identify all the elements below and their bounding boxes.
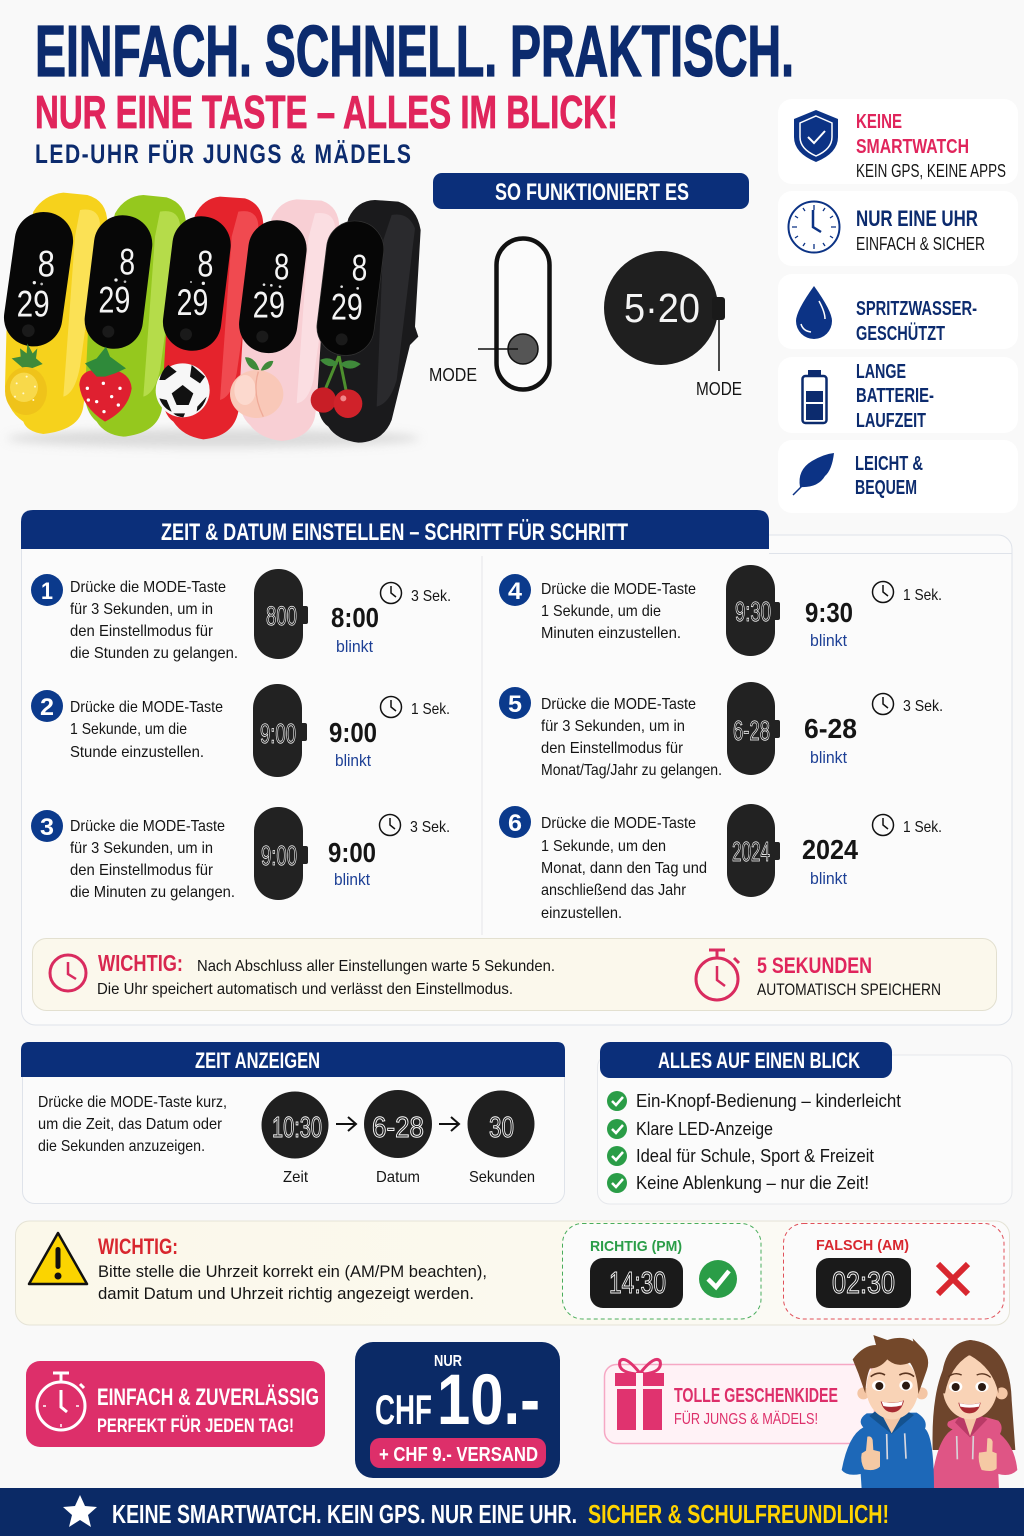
heading: schritt fuer schritt xyxy=(21,510,769,549)
icon: warning triangle xyxy=(29,1233,87,1284)
feature card: keine smartwatch: SMARTWATCH xyxy=(856,136,969,158)
callout: wichtig, automatisch speichern: WICHTIG: xyxy=(98,950,183,976)
watch: red football: 29 xyxy=(177,281,208,323)
panel: alles auf einen blick: ALLES AUF EINEN BLICK xyxy=(658,1048,860,1073)
richtig example: 14:30 xyxy=(609,1265,666,1300)
watch face: zeit: 10:30 xyxy=(272,1112,322,1144)
step 2: 9:00 xyxy=(260,718,296,749)
check item: Ein-Knopf-Bedienung – kinderleicht xyxy=(636,1091,901,1111)
panel: wichtig am pm: damit Datum und Uhrzeit richtig angezeigt werden. xyxy=(98,1284,474,1303)
step 2 xyxy=(31,684,450,777)
step 5: 5 xyxy=(508,691,522,718)
step 4 xyxy=(499,565,942,656)
footer banner: KEINE SMARTWATCH. KEIN GPS. NUR EINE UHR. xyxy=(112,1499,577,1529)
product line: LED-UHR FÜR JUNGS & MÄDELS xyxy=(35,140,411,170)
step 5: Monat/Tag/Jahr zu gelangen. xyxy=(541,762,722,779)
step 6: einzustellen. xyxy=(541,905,622,922)
step 6: 2024 xyxy=(732,836,770,867)
step 6 xyxy=(499,804,942,922)
panel: zeit und datum einstellen xyxy=(21,510,1012,1025)
feature card: spritzwassergeschuetzt: GESCHÜTZT xyxy=(856,322,945,345)
watch: pink peach: 29 xyxy=(253,283,285,325)
icon: feather xyxy=(793,453,834,495)
heading: so funktioniert es xyxy=(433,173,749,209)
subtitle: NUR EINE TASTE – ALLES IM BLICK! xyxy=(35,86,618,138)
step 3: 3 xyxy=(40,814,54,841)
step 3: blinkt xyxy=(334,870,370,889)
feature card: lange batterielaufzeit: LANGE xyxy=(856,361,906,383)
falsch example: 02:30 xyxy=(832,1265,895,1300)
step 1: 3 Sek. xyxy=(411,588,451,605)
richtig example: RICHTIG (PM) xyxy=(590,1238,682,1255)
step 1 xyxy=(31,569,451,662)
step 2: 9:00 xyxy=(329,717,377,748)
arrow xyxy=(439,1117,459,1131)
step 3: Drücke die MODE-Taste xyxy=(70,818,225,835)
illustration: boy xyxy=(842,1335,934,1489)
step 1: 800 xyxy=(266,601,297,631)
panel: alles auf einen blick xyxy=(598,1042,1012,1204)
gift callout: FÜR JUNGS & MÄDELS! xyxy=(674,1410,818,1428)
panel: wichtig am pm: Bitte stelle die Uhrzeit korrekt ein (AM/PM beachten), xyxy=(98,1262,487,1281)
watch face: datum: 6-28 xyxy=(372,1112,424,1144)
step 1: 1 xyxy=(41,578,53,605)
illustration: girl xyxy=(931,1340,1017,1489)
step 5: den Einstellmodus für xyxy=(541,740,684,757)
check item: Keine Ablenkung – nur die Zeit! xyxy=(636,1173,869,1193)
diagram: round watch face 5:20 xyxy=(604,251,742,399)
price box xyxy=(355,1342,560,1478)
step 6: Drücke die MODE-Taste xyxy=(541,815,696,832)
watch face: datum: Datum xyxy=(376,1169,420,1186)
step 2: 2 xyxy=(40,694,54,721)
gift callout xyxy=(604,1359,874,1444)
feature card: lange batterielaufzeit: BATTERIE- xyxy=(856,385,934,407)
panel: zeit anzeigen xyxy=(21,1042,565,1204)
badge: einfach und zuverlaessig: PERFEKT FÜR JEDEN TAG! xyxy=(97,1416,294,1437)
step 3 xyxy=(31,807,450,901)
step 1: Drücke die MODE-Taste xyxy=(70,579,226,596)
step 3: 9:00 xyxy=(261,840,297,871)
diagram: band with mode button: MODE xyxy=(429,365,477,385)
feature card: lange batterielaufzeit xyxy=(778,357,1018,433)
feature card: nur eine uhr: NUR EINE UHR xyxy=(856,206,978,231)
feature card: leicht und bequem xyxy=(778,440,1018,513)
step 4: Drücke die MODE-Taste xyxy=(541,581,696,598)
callout: wichtig, automatisch speichern: Die Uhr speichert automatisch und verlässt den Einstellmodus. xyxy=(97,981,513,998)
panel: wichtig am pm xyxy=(16,1221,1010,1325)
icon: clock xyxy=(788,202,840,252)
watch: pink peach xyxy=(230,199,339,441)
richtig example xyxy=(562,1224,761,1319)
feature card: keine smartwatch: KEINE xyxy=(856,111,902,133)
step 2: 1 Sekunde, um die xyxy=(70,721,187,738)
feature card: keine smartwatch xyxy=(778,99,1018,184)
check item: Ideal für Schule, Sport & Freizeit xyxy=(636,1146,874,1166)
icon: stopwatch xyxy=(37,1373,85,1430)
heading: so funktioniert es: SO FUNKTIONIERT ES xyxy=(495,179,689,206)
step 6: 1 Sekunde, um den xyxy=(541,838,666,855)
diagram: round watch face 5:20: 5·20 xyxy=(624,285,700,331)
icon: battery xyxy=(802,370,826,423)
falsch example: FALSCH (AM) xyxy=(816,1237,909,1254)
check item: Klare LED-Anzeige xyxy=(636,1119,773,1139)
step 1: 8:00 xyxy=(331,602,379,633)
falsch example xyxy=(784,1224,1004,1319)
step 1: blinkt xyxy=(336,637,373,656)
price box: + CHF 9.- VERSAND xyxy=(379,1444,538,1466)
feature card: nur eine uhr xyxy=(778,191,1018,266)
footer banner xyxy=(0,1488,1024,1536)
step 5: für 3 Sekunden, um in xyxy=(541,718,685,735)
arrow xyxy=(336,1117,356,1131)
watch: red football xyxy=(156,197,263,439)
step 3: den Einstellmodus für xyxy=(70,862,214,879)
gift callout: TOLLE GESCHENKIDEE xyxy=(674,1385,838,1407)
step 4: 1 Sek. xyxy=(903,587,942,604)
watch: pink peach: 8 xyxy=(274,245,289,287)
feature card: lange batterielaufzeit: LAUFZEIT xyxy=(856,410,926,432)
step 3: für 3 Sekunden, um in xyxy=(70,840,213,857)
step 5: 6-28 xyxy=(804,713,857,744)
watch face: datum xyxy=(364,1090,432,1186)
step 4: blinkt xyxy=(810,631,847,650)
step 4: Minuten einzustellen. xyxy=(541,625,681,642)
badge: einfach und zuverlaessig xyxy=(26,1361,325,1447)
step 4: 4 xyxy=(508,578,523,605)
watch face: zeit: Zeit xyxy=(283,1169,309,1186)
step 6: 6 xyxy=(508,810,522,837)
step 5 xyxy=(499,682,943,779)
step 2: Stunde einzustellen. xyxy=(70,744,204,761)
watch face: sekunden: Sekunden xyxy=(469,1169,535,1186)
watch: black cherries: 29 xyxy=(331,285,363,327)
step 2: blinkt xyxy=(335,751,371,770)
panel: zeit anzeigen: um die Zeit, das Datum oder xyxy=(38,1116,223,1133)
diagram: band with mode button xyxy=(429,238,550,390)
step 1: die Stunden zu gelangen. xyxy=(70,645,238,662)
watch: yellow pineapple xyxy=(0,193,107,434)
step 5: Drücke die MODE-Taste xyxy=(541,696,696,713)
panel: zeit anzeigen: die Sekunden anzuzeigen. xyxy=(38,1138,205,1155)
price box: CHF xyxy=(375,1386,432,1433)
feature card: nur eine uhr: EINFACH & SICHER xyxy=(856,234,985,254)
icon: water drop xyxy=(796,286,832,339)
step 6: 1 Sek. xyxy=(903,819,942,836)
step 5: blinkt xyxy=(810,748,847,767)
panel: wichtig am pm: WICHTIG: xyxy=(98,1234,178,1259)
feature card: spritzwassergeschuetzt: SPRITZWASSER- xyxy=(856,298,977,320)
watch: green strawberry: 8 xyxy=(119,240,135,282)
badge: einfach und zuverlaessig: EINFACH & ZUVERLÄSSIG xyxy=(97,1384,319,1411)
step 3: 3 Sek. xyxy=(410,819,450,836)
step 6: 2024 xyxy=(802,834,858,865)
step 3: 9:00 xyxy=(328,837,376,868)
step 4: 9:30 xyxy=(735,596,771,627)
feature card: leicht und bequem: BEQUEM xyxy=(855,477,917,499)
step 6: blinkt xyxy=(810,869,847,888)
step 1: für 3 Sekunden, um in xyxy=(70,601,213,618)
watch: yellow pineapple: 29 xyxy=(17,282,50,324)
step 3: die Minuten zu gelangen. xyxy=(70,884,235,901)
watch face: sekunden: 30 xyxy=(489,1112,514,1144)
watch: green strawberry: 29 xyxy=(98,279,130,321)
heading: schritt fuer schritt: ZEIT & DATUM EINSTELLEN – SCHRITT FÜR SCHRITT xyxy=(161,519,628,546)
step 2: Drücke die MODE-Taste xyxy=(70,699,223,716)
panel: zeit anzeigen: Drücke die MODE-Taste kurz, xyxy=(38,1094,227,1111)
watch: red football: 8 xyxy=(197,243,213,285)
feature card: spritzwassergeschuetzt xyxy=(778,274,1018,349)
watch face: sekunden xyxy=(468,1090,535,1186)
icon: stopwatch xyxy=(696,950,739,1000)
footer banner: SICHER & SCHULFREUNDLICH! xyxy=(588,1499,889,1529)
panel: zeit anzeigen: ZEIT ANZEIGEN xyxy=(195,1048,320,1073)
icon: gift box xyxy=(615,1359,664,1430)
price box: NUR xyxy=(434,1353,462,1370)
step 5: 3 Sek. xyxy=(903,698,943,715)
watch: black cherries xyxy=(311,200,421,443)
callout: wichtig, automatisch speichern xyxy=(32,938,996,1010)
callout: wichtig, automatisch speichern: AUTOMATISCH SPEICHERN xyxy=(757,980,941,999)
watch: black cherries: 8 xyxy=(352,247,367,289)
step 4: 1 Sekunde, um die xyxy=(541,603,661,620)
callout: wichtig, automatisch speichern: 5 SEKUNDEN xyxy=(757,953,872,978)
callout: wichtig, automatisch speichern: Nach Abschluss aller Einstellungen warte 5 Sekunden. xyxy=(197,958,555,975)
icon: star xyxy=(63,1495,97,1527)
icon: shield xyxy=(794,110,838,162)
feature card: leicht und bequem: LEICHT & xyxy=(855,453,923,475)
watch: yellow pineapple: 8 xyxy=(38,242,55,284)
step 2: 1 Sek. xyxy=(411,701,450,718)
step 4: 9:30 xyxy=(805,597,853,628)
step 6: anschließend das Jahr xyxy=(541,882,687,899)
step 1: den Einstellmodus für xyxy=(70,623,214,640)
product photo: five LED watches xyxy=(0,193,421,448)
step 6: Monat, dann den Tag und xyxy=(541,860,707,877)
watch face: zeit xyxy=(262,1092,328,1186)
price box: 10.- xyxy=(437,1361,540,1440)
watch: green strawberry xyxy=(79,195,186,437)
diagram: round watch face 5:20: MODE xyxy=(696,379,742,399)
step 5: 6-28 xyxy=(733,715,770,746)
